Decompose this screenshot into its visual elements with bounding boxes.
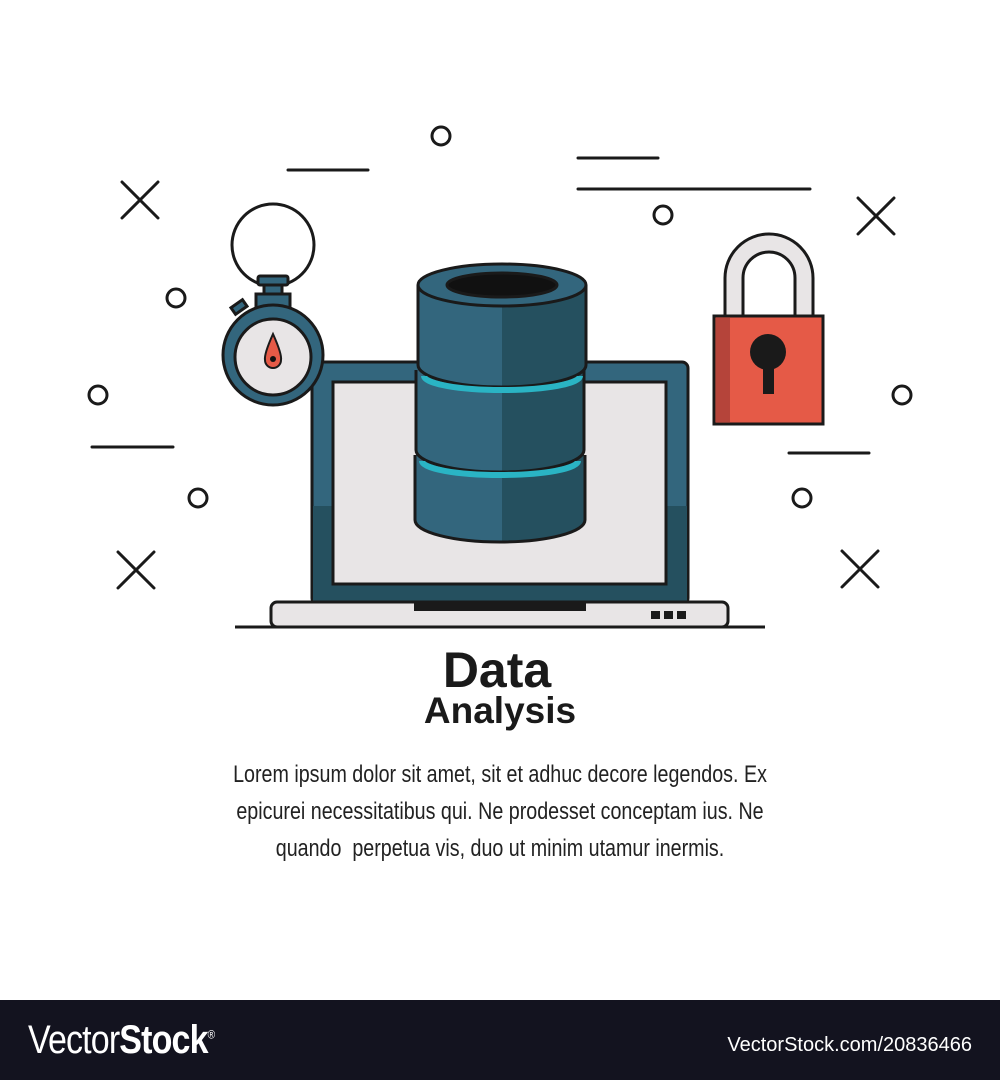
body text: epicurei necessitatibus qui. Ne prodesset conceptam ius. Ne [236,798,764,825]
title: Data [443,642,551,698]
subtitle: Analysis [424,690,576,731]
laptop [235,362,765,627]
body text [233,761,767,862]
image id: VectorStock.com/20836466 [727,1034,972,1056]
icon: stopwatch [223,204,323,405]
footer bar [0,1000,1000,1080]
logo: VectorStock® [28,1018,214,1062]
icon: database [415,264,586,542]
body text: Lorem ipsum dolor sit amet, sit et adhuc decore legendos. Ex [233,761,767,788]
body text: quando perpetua vis, duo ut minim utamur inermis. [276,835,724,862]
icon: padlock [714,234,823,424]
